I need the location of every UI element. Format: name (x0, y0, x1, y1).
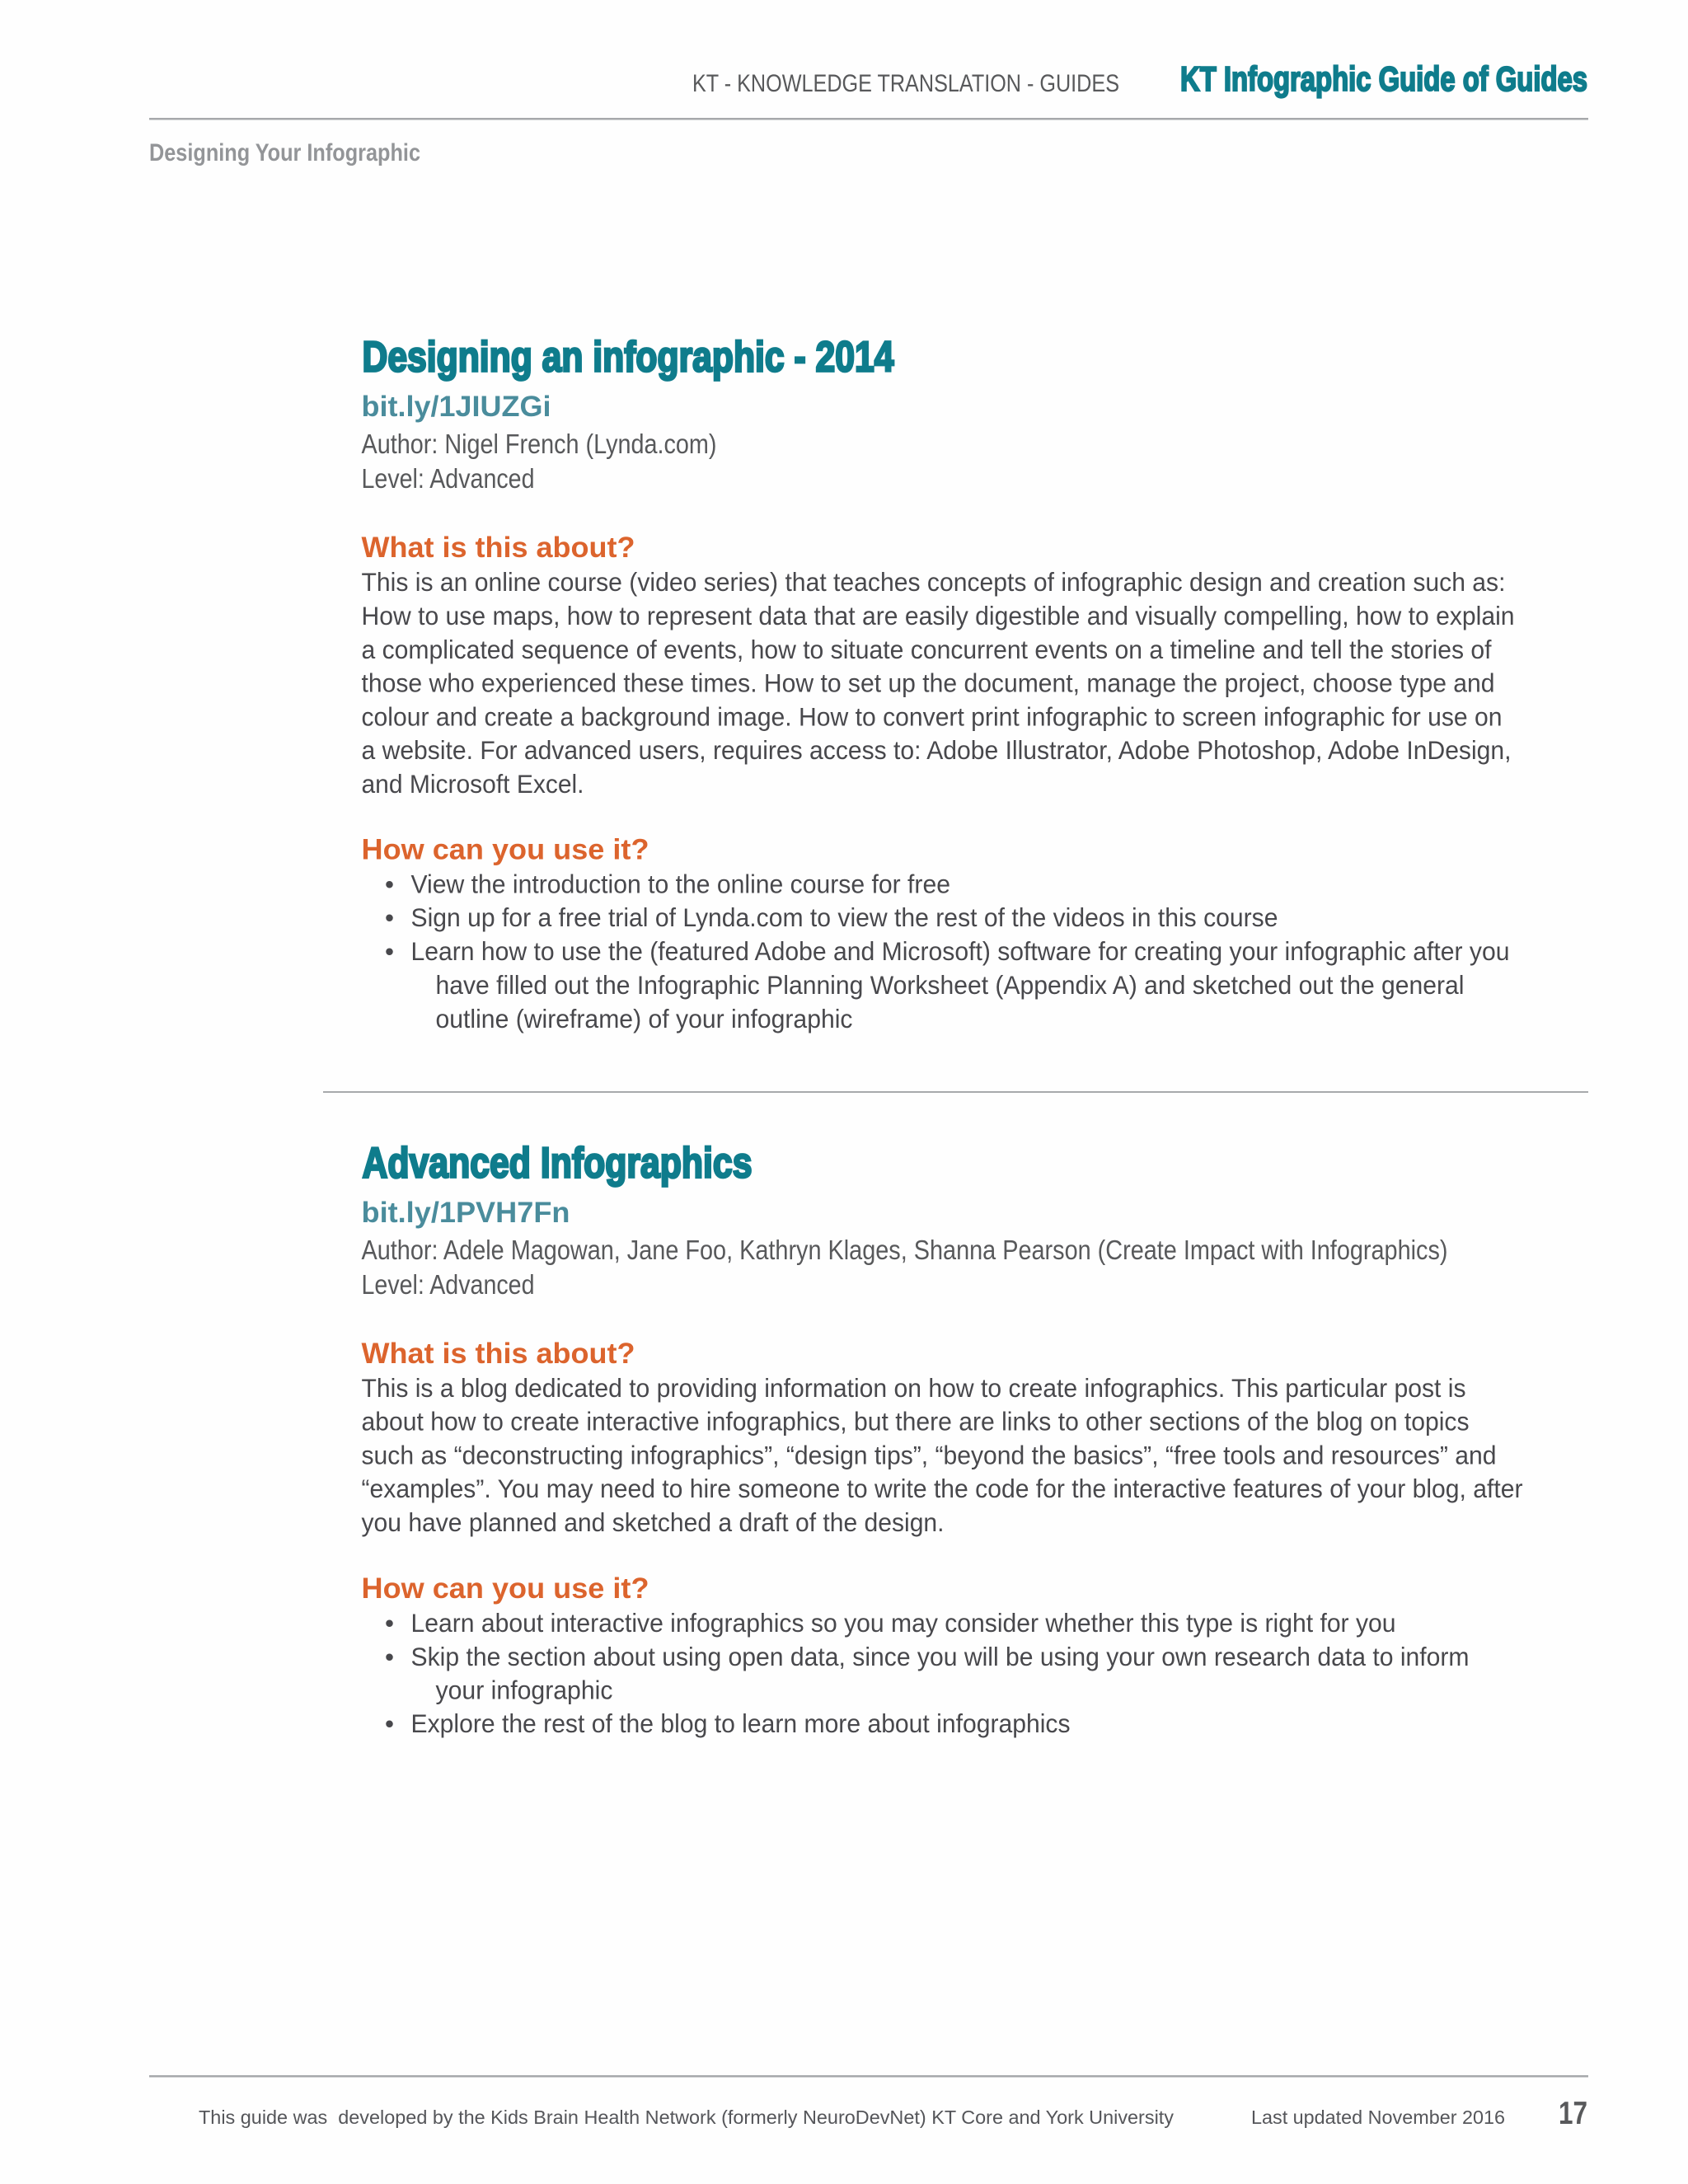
bullet list: Sign up for a free trial of Lynda.com to view the rest of the videos in this course (410, 902, 1278, 932)
page number: 17 (1559, 2096, 1587, 2131)
entry author and level: Level: Advanced (361, 463, 534, 494)
entry author and level: Author: Nigel French (Lynda.com) (361, 429, 717, 459)
bullet list (385, 1608, 1469, 1738)
description paragraph: you have planned and sketched a draft of the design. (361, 1507, 945, 1537)
description paragraph: This is an online course (video series) that teaches concepts of infographic design and creation such as: (361, 567, 1505, 597)
bullet list: • (385, 1642, 394, 1671)
section label: Designing Your Infographic (149, 139, 420, 166)
bullet list: Explore the rest of the blog to learn more about infographics (410, 1708, 1070, 1738)
bullet list: • (385, 1708, 394, 1738)
description paragraph: a website. For advanced users, requires access to: Adobe Illustrator, Adobe Photoshop, Adobe InDesign, (361, 735, 1512, 765)
bullet list: • (385, 1608, 394, 1638)
bullet list: View the introduction to the online course for free (410, 869, 950, 898)
footer credit: This guide was developed by the Kids Brain Health Network (formerly NeuroDevNet) KT Core and York University (199, 2107, 1175, 2128)
description paragraph: about how to create interactive infographics, but there are links to other sections of the blog on topics (361, 1407, 1469, 1436)
heading: how can you use it: How can you use it? (361, 1572, 649, 1605)
heading: what is this about: What is this about? (361, 1338, 635, 1370)
entry author and level: Author: Adele Magowan, Jane Foo, Kathryn Klages, Shanna Pearson (Create Impact with Infographics) (361, 1235, 1447, 1265)
entry link: bit.ly/1JIUZGi (361, 391, 551, 423)
bullet list: have filled out the Infographic Planning Worksheet (Appendix A) and sketched out the general (435, 970, 1464, 1000)
resource entry: Designing an infographic (361, 333, 1515, 1033)
description paragraph (361, 1373, 1523, 1537)
description paragraph: How to use maps, how to represent data that are easily digestible and visually compelling, how to explain (361, 601, 1515, 630)
bullet list (385, 869, 1510, 1033)
bullet list: • (385, 936, 394, 966)
entry author and level: Level: Advanced (361, 1269, 534, 1300)
entry title: Designing an infographic - 2014 (363, 333, 894, 381)
description paragraph: such as “deconstructing infographics”, “design tips”, “beyond the basics”, “free tools and resources” and (361, 1440, 1497, 1469)
entry author and level (361, 429, 717, 494)
description paragraph: a complicated sequence of events, how to situate concurrent events on a timeline and tell the stories of (361, 635, 1492, 664)
description paragraph (361, 567, 1515, 799)
entry author and level (361, 1235, 1447, 1300)
footer date: Last updated November 2016 (1251, 2107, 1505, 2128)
entry link: bit.ly/1PVH7Fn (361, 1197, 570, 1229)
entry title: Advanced Infographics (363, 1139, 752, 1187)
header guide series label: KT - KNOWLEDGE TRANSLATION - GUIDES (692, 70, 1119, 97)
header (149, 59, 1588, 166)
description paragraph: and Microsoft Excel. (361, 769, 584, 799)
description paragraph: “examples”. You may need to hire someone to write the code for the interactive features of your blog, after (361, 1474, 1523, 1503)
bullet list: • (385, 869, 394, 898)
bullet list: outline (wireframe) of your infographic (435, 1004, 852, 1033)
bullet list: your infographic (435, 1675, 613, 1704)
heading: how can you use it: How can you use it? (361, 834, 649, 865)
description paragraph: colour and create a background image. How to convert print infographic to screen infographic for use on (361, 701, 1502, 731)
footer (149, 2075, 1588, 2131)
description paragraph: This is a blog dedicated to providing information on how to create infographics. This particular post is (361, 1373, 1465, 1403)
bullet list: Skip the section about using open data, since you will be using your own research data to inform (410, 1642, 1469, 1671)
header guide title: KT Infographic Guide of Guides (1180, 59, 1587, 98)
resource entry: Advanced Infographics (361, 1139, 1523, 1738)
heading: what is this about: What is this about? (361, 532, 635, 564)
bullet list: • (385, 902, 394, 932)
description paragraph: those who experienced these times. How to set up the document, manage the project, choose type and (361, 668, 1495, 698)
bullet list: Learn about interactive infographics so you may consider whether this type is right for you (410, 1608, 1396, 1638)
bullet list: Learn how to use the (featured Adobe and Microsoft) software for creating your infographic after you (410, 936, 1510, 966)
